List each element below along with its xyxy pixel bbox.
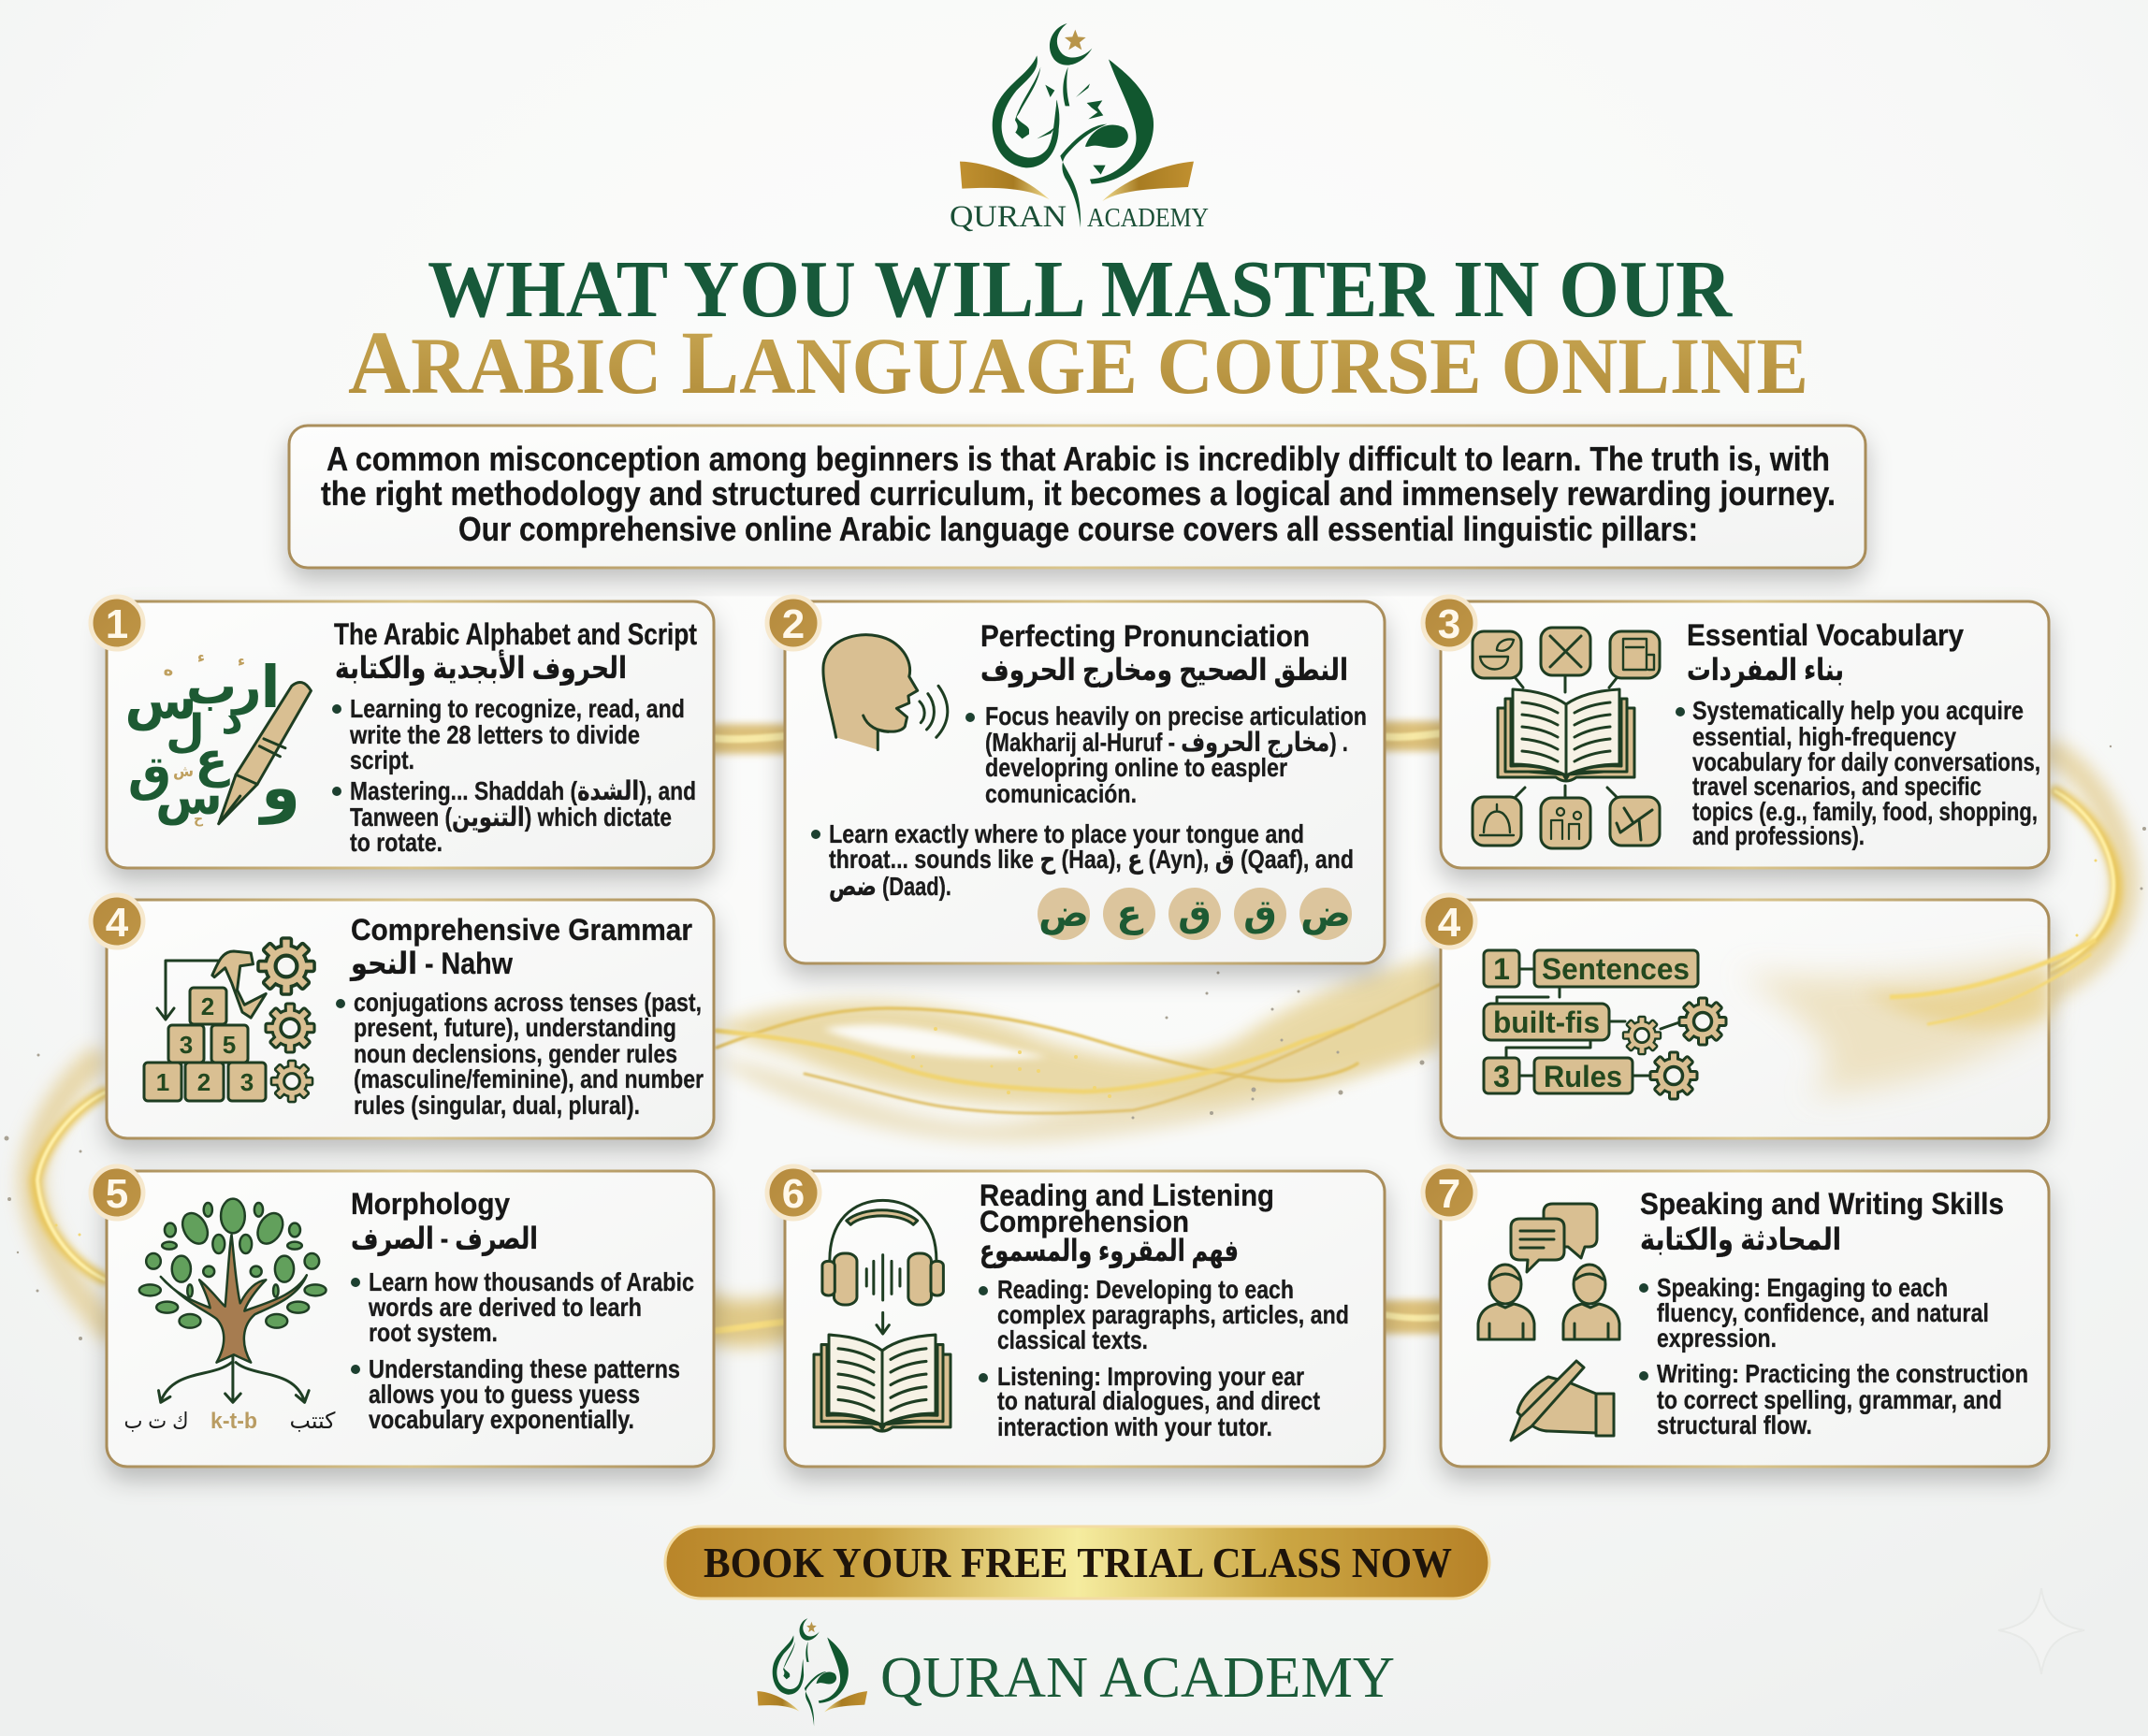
sparkle dots <box>4 745 2146 1340</box>
panel: 5 morphology: words are derived to learh <box>368 1293 642 1322</box>
badge 4 <box>1423 895 1475 948</box>
panel: 2 pronunciation: (Makharij al-Huruf - مخارج الحروف) . <box>985 728 1348 759</box>
letter coins: ض <box>1038 892 1089 935</box>
panel: 7 speaking and writing: structural flow. <box>1657 1410 1812 1439</box>
panel: 7 speaking and writing: fluency, confidence, and natural <box>1657 1298 1989 1327</box>
badge 6 <box>767 1166 820 1219</box>
panel: 6 reading and listening <box>767 1166 1385 1467</box>
icon: number blocks and gears <box>144 938 314 1102</box>
panel: 1 alphabet: الحروف الأبجدية والكتابة <box>335 649 627 686</box>
panel: 3 vocabulary: travel scenarios, and specific <box>1692 772 1981 801</box>
icon: book with topic tiles <box>1473 628 1660 848</box>
panel: 7 speaking and writing: Speaking and Writing Skills <box>1640 1187 2004 1221</box>
panel: 1 alphabet: Mastering... Shaddah (الشدة), and <box>350 776 696 805</box>
icon: arabic letters and pen: ء <box>197 648 205 666</box>
panel: 1 alphabet: Learning to recognize, read, and <box>350 694 685 723</box>
badge 2: 2 <box>782 601 805 647</box>
panel: 5 morphology: Morphology <box>351 1187 510 1221</box>
intro panel: Our comprehensive online Arabic language course covers all essential linguistic pillars: <box>458 510 1698 548</box>
panel: 6 reading and listening: to natural dialogues, and direct <box>997 1386 1320 1415</box>
letter coins: ض <box>1300 892 1351 935</box>
panel: 3 vocabulary: essential, high-frequency <box>1692 722 1956 751</box>
badge 5 <box>91 1166 143 1219</box>
title: ARABIC LANGUAGE COURSE ONLINE <box>348 312 1808 412</box>
title <box>348 243 1808 412</box>
panel: 7 speaking and writing: expression. <box>1657 1324 1777 1353</box>
icon: number blocks and gears: 5 <box>223 1031 236 1059</box>
root labels: ك ت ب <box>123 1409 189 1434</box>
panel: 1 alphabet <box>91 597 714 868</box>
panel: 1 alphabet: to rotate. <box>350 828 443 857</box>
icon: arabic letters and pen: س <box>124 671 197 731</box>
panel: 5 morphology: الصرف - الصرف <box>351 1222 538 1256</box>
panel: 6 reading and listening: Reading: Developing to each <box>997 1275 1294 1304</box>
panel: 1 alphabet: The Arabic Alphabet and Script <box>334 617 697 651</box>
icon: arabic letters and pen <box>124 648 311 827</box>
icon: sentence diagram: 3 <box>1493 1060 1510 1093</box>
panel: 3 vocabulary <box>1423 597 2049 868</box>
panel: 4 grammar: النحو - Nahw <box>349 947 513 981</box>
panel: 3 vocabulary: vocabulary for daily conversations, <box>1692 747 2040 776</box>
panel: 3 vocabulary: Systematically help you acquire <box>1692 696 2024 725</box>
icon: arabic letters and pen: ب <box>186 657 237 716</box>
button: book free trial <box>665 1526 1489 1599</box>
icon: sentence diagram: Sentences <box>1542 952 1690 986</box>
panel: 2 pronunciation: comunicación. <box>985 779 1137 808</box>
icon: arabic letters and pen: و <box>258 751 300 825</box>
icon: arabic letters and pen: ق <box>128 746 171 803</box>
panel: 5 morphology: Understanding these patterns <box>369 1354 680 1383</box>
badge 7: 7 <box>1438 1171 1460 1217</box>
letter coins: ق <box>1178 892 1212 935</box>
panel: 6 reading and listening: interaction with your tutor. <box>997 1412 1272 1441</box>
icon: arabic letters and pen: ا <box>260 653 281 721</box>
logo: Quran Academy header: ACADEMY <box>1087 204 1209 233</box>
icon: arabic letters and pen: ء <box>238 652 245 670</box>
intro panel: the right methodology and structured curriculum, it becomes a logical and immensely rewarding journey. <box>321 474 1836 513</box>
logo: Quran Academy header: QURAN <box>950 200 1067 234</box>
icon: number blocks and gears: 3 <box>240 1068 254 1096</box>
badge 4: 4 <box>1438 900 1461 946</box>
root labels <box>123 1409 336 1434</box>
panel: 6 reading and listening: Reading and Listening <box>980 1179 1274 1212</box>
panel: 7 speaking and writing: to correct spelling, grammar, and <box>1657 1385 2002 1414</box>
panel: 2 pronunciation: Perfecting Pronunciation <box>980 619 1310 653</box>
panel: 2 pronunciation: Learn exactly where to place your tongue and <box>829 819 1304 848</box>
icon: arabic letters and pen: ه <box>164 660 173 680</box>
icon: root tree <box>139 1199 327 1402</box>
panel: 5 morphology: root system. <box>369 1318 498 1347</box>
icon: sentence diagram: Rules <box>1544 1060 1622 1093</box>
icon: sentence diagram: 1 <box>1493 952 1510 986</box>
panel: 6 reading and listening: Listening: Improving your ear <box>997 1362 1304 1391</box>
icon: number blocks and gears: 2 <box>201 992 214 1020</box>
root labels: k-t-b <box>210 1409 257 1434</box>
panel: 5 morphology: vocabulary exponentially. <box>369 1405 634 1434</box>
watermark sparkle <box>1998 1588 2084 1674</box>
panel: 3 vocabulary: topics (e.g., family, food, shopping, <box>1692 797 2038 826</box>
panel: 6 reading and listening: فهم المقروء والمسموع <box>980 1234 1239 1268</box>
panel: 4 grammar: (masculine/feminine), and number <box>354 1064 704 1093</box>
icon: arabic letters and pen: ر <box>229 657 262 716</box>
badge 3: 3 <box>1438 601 1460 647</box>
panel: 3 vocabulary: Essential Vocabulary <box>1687 618 1964 652</box>
icon: arabic letters and pen: ح <box>194 812 204 827</box>
icon: arabic letters and pen: ل <box>166 705 205 758</box>
icon: number blocks and gears: 2 <box>197 1068 210 1096</box>
badge 6: 6 <box>782 1171 805 1217</box>
panel: 2 pronunciation: throat... sounds like ح (Haa), ع (Ayn), ق (Qaaf), and <box>829 845 1354 875</box>
badge 7 <box>1423 1166 1475 1219</box>
root labels: كتتب <box>290 1409 336 1434</box>
panel: 4 grammar: present, future), understanding <box>354 1013 676 1042</box>
panel: 1 alphabet: Tanween (التنوين) which dictate <box>350 803 672 832</box>
panel: 4 sentences <box>1423 895 2096 1138</box>
badge 2 <box>767 597 820 649</box>
letter coins: ع <box>1116 892 1143 935</box>
icon: arabic letters and pen: ع <box>195 732 230 788</box>
swoosh overlay inside panel <box>1740 940 2096 1094</box>
panel: 4 grammar <box>91 895 714 1138</box>
icon: headphones and book <box>814 1200 951 1431</box>
panel: 2 pronunciation: النطق الصحيح ومخارج الحروف <box>980 653 1348 687</box>
logo: footer <box>757 1618 1395 1726</box>
panel: 3 vocabulary: and professions). <box>1692 821 1865 850</box>
panel: 4 grammar: noun declensions, gender rules <box>354 1039 677 1068</box>
panel: 6 reading and listening: Comprehension <box>980 1205 1189 1238</box>
badge 1: 1 <box>106 601 128 647</box>
intro panel: A common misconception among beginners is that Arabic is incredibly difficult to learn. The truth is, with <box>327 440 1830 478</box>
panel: 7 speaking and writing: Writing: Practicing the construction <box>1657 1359 2028 1388</box>
panel: 5 morphology: allows you to guess yuess <box>369 1380 640 1409</box>
icon: speech bubbles, people and writing hand <box>1478 1204 1619 1440</box>
icon: speaking head <box>823 635 948 750</box>
button: book free trial: BOOK YOUR FREE TRIAL CLASS NOW <box>704 1539 1452 1586</box>
badge 4 <box>91 895 143 948</box>
icon: number blocks and gears: 3 <box>180 1031 193 1059</box>
badge 1 <box>91 597 143 649</box>
letter coins <box>1038 888 1352 940</box>
panel: 2 pronunciation: developring online to easpler <box>985 753 1287 782</box>
gold swoosh ribbon <box>32 732 2126 1332</box>
panel: 6 reading and listening: complex paragraphs, articles, and <box>997 1300 1349 1329</box>
panel: 6 reading and listening: classical texts. <box>997 1325 1148 1354</box>
panel: 5 morphology: Learn how thousands of Arabic <box>369 1267 694 1296</box>
logo: Quran Academy header <box>950 23 1209 234</box>
letter coins: ق <box>1243 892 1277 935</box>
icon: arabic letters and pen: س <box>155 770 223 826</box>
panel: 1 alphabet: script. <box>350 745 414 774</box>
panel: 7 speaking and writing <box>1423 1166 2049 1467</box>
icon: sentence diagram <box>1484 950 1726 1099</box>
panel: 4 grammar: conjugations across tenses (past, <box>354 988 702 1017</box>
panel: 2 pronunciation <box>767 597 1385 963</box>
panel: 4 grammar: rules (singular, dual, plural). <box>354 1091 640 1120</box>
icon: sentence diagram: built-fis <box>1493 1005 1600 1039</box>
icon: number blocks and gears: 1 <box>156 1068 169 1096</box>
icon: arabic letters and pen: د <box>221 693 243 744</box>
panel: 7 speaking and writing: المحادثة والكتابة <box>1640 1222 1841 1257</box>
panel: 1 alphabet: write the 28 letters to divide <box>349 720 640 749</box>
panel: 5 morphology <box>91 1166 714 1467</box>
intro panel <box>289 426 1865 568</box>
panel: 2 pronunciation: Focus heavily on precise articulation <box>985 702 1367 731</box>
panel: 4 grammar: Comprehensive Grammar <box>351 913 692 947</box>
badge 5: 5 <box>106 1171 128 1217</box>
icon: arabic letters and pen: ش <box>173 762 194 780</box>
panel: 7 speaking and writing: Speaking: Engaging to each <box>1657 1273 1948 1302</box>
badge 3 <box>1423 597 1475 649</box>
panel: 3 vocabulary: بناء المفردات <box>1687 653 1844 687</box>
badge 4: 4 <box>106 900 129 946</box>
logo: footer: QURAN ACADEMY <box>880 1646 1395 1710</box>
panel: 2 pronunciation: ضص (Daad). <box>829 872 951 902</box>
title: WHAT YOU WILL MASTER IN OUR <box>428 243 1733 334</box>
